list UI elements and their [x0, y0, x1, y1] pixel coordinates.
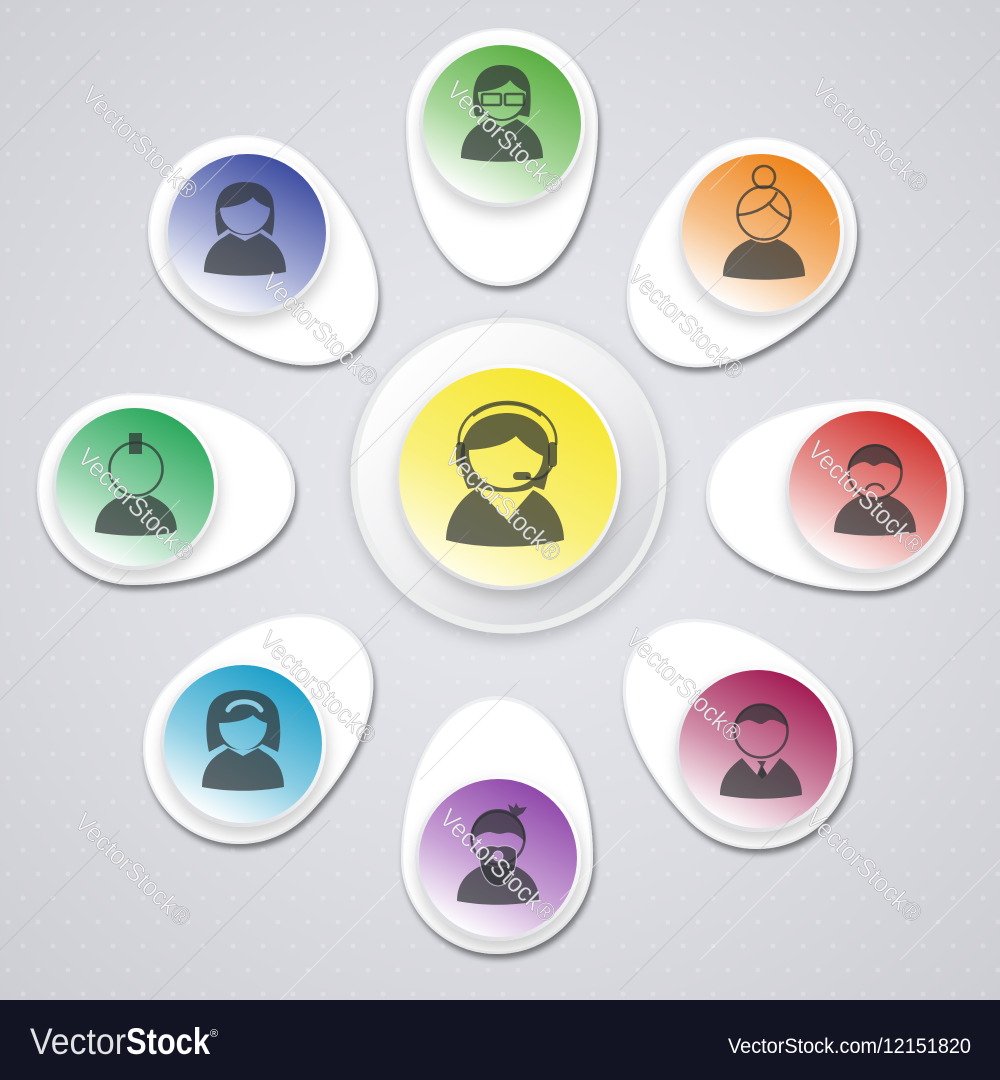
- petal: bottom purple, bearded man: [401, 696, 593, 954]
- watermark text: VectorStock®: [806, 73, 935, 199]
- petal: top green, glasses: [406, 28, 598, 286]
- watermark text: VectorStock®: [800, 803, 929, 929]
- watermark text: [69, 73, 935, 933]
- petal: lower left blue, headband: [103, 566, 421, 884]
- watermark text: VectorStock®: [439, 442, 568, 568]
- icon: woman with glasses: [461, 65, 543, 162]
- watermark text: VectorStock®: [441, 75, 570, 201]
- icon: agent with headset: [446, 402, 564, 547]
- watermark text: VectorStock®: [254, 625, 383, 751]
- watermark text: VectorStock®: [72, 442, 201, 568]
- watermark text: VectorStock®: [802, 435, 931, 561]
- watermark text: VectorStock®: [620, 623, 749, 749]
- icon: woman with bun: [723, 166, 805, 280]
- footer logo: Stock: [126, 1021, 210, 1062]
- footer logo: ®: [210, 1028, 218, 1040]
- watermark text: VectorStock®: [76, 80, 205, 206]
- footer bar: [0, 1000, 1000, 1080]
- icon: woman with bob: [204, 182, 286, 276]
- watermark text: VectorStock®: [256, 267, 385, 393]
- petal: lower right crimson, suit and tie: [575, 571, 893, 889]
- icon: bearded man with topknot: [457, 803, 539, 905]
- icon: woman with headband: [202, 690, 284, 791]
- footer logo: Vector: [30, 1021, 126, 1062]
- petal: right red, moustache: [706, 399, 964, 591]
- icon: person with top knob: [95, 433, 177, 536]
- petal: upper right orange, hair bun: [579, 97, 897, 415]
- icon: man with moustache: [834, 444, 916, 536]
- footer image id: VectorStock.com/12151820: [728, 1035, 971, 1058]
- petal: upper left indigo, woman: [108, 95, 426, 413]
- watermark text: VectorStock®: [69, 807, 198, 933]
- footer logo: [30, 1021, 218, 1062]
- watermark text: VectorStock®: [434, 803, 563, 929]
- icon: man in suit: [720, 704, 802, 799]
- petal: left green, ring head: [37, 393, 295, 585]
- watermark text: VectorStock®: [622, 260, 751, 386]
- centre medallion: [350, 318, 666, 634]
